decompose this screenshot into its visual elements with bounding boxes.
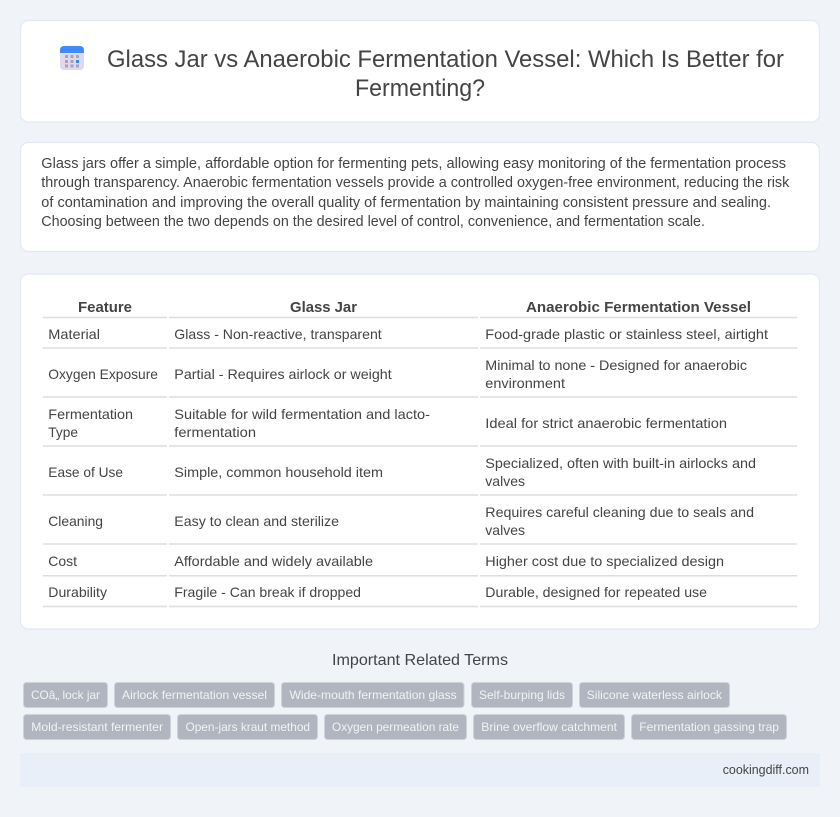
intro text: Choosing between the two depends on the desired level of control, convenience, and fermentation scale. [41,214,705,230]
row: oxygen exposure: Minimal to none - Designed for anaerobic [485,357,747,373]
tag: Airlock fermentation vessel [122,688,267,702]
row: durability: Durable, designed for repeated use [485,584,707,600]
table header row: Anaerobic Fermentation Vessel [526,299,751,316]
intro text: through transparency. Anaerobic fermentation vessels provide a controlled oxygen-free environment, reducing the risk [41,175,790,191]
table header row: Glass Jar [290,299,357,316]
intro text: of contamination and improving the overall quality of fermentation by maintaining consistent pressure and sealing. [41,195,771,211]
row: ease of use: Specialized, often with built-in airlocks and [485,455,756,471]
tag: Fermentation gassing trap [639,720,779,734]
tag: COâ„ lock jar [31,688,100,702]
row: oxygen exposure [48,357,747,391]
comparison table panel [20,274,820,629]
row: cleaning: Cleaning [48,513,103,529]
row: oxygen exposure: environment [485,375,565,391]
row: ease of use: valves [485,473,525,489]
header panel [20,20,820,122]
tag: Mold-resistant fermenter [31,720,163,734]
row: fermentation type: Ideal for strict anaerobic fermentation [485,415,727,431]
row: fermentation type: Type [48,424,78,440]
tag [324,714,466,740]
row: material: Glass - Non-reactive, transparent [174,326,382,342]
row: durability: Fragile - Can break if dropped [174,584,361,600]
tag: Self-burping lids [479,688,565,702]
tag: Wide-mouth fermentation glass [290,688,457,702]
footer [20,753,820,787]
tag [24,682,108,708]
footer: cookingdiff.com [723,763,809,777]
row: cleaning [48,504,754,538]
row: fermentation type: Fermentation [48,406,133,422]
row: ease of use [48,455,756,489]
tag: Silicone waterless airlock [587,688,723,702]
row: oxygen exposure: Partial - Requires airlock or weight [174,366,392,382]
tag [472,682,572,708]
row: fermentation type: Suitable for wild fermentation and lacto- [174,406,430,422]
title: Fermenting? [355,75,485,102]
tag [580,682,730,708]
row: ease of use: Ease of Use [48,464,123,480]
tag [282,682,464,708]
row: oxygen exposure: Oxygen Exposure [48,366,158,382]
title: Glass Jar vs Anaerobic Fermentation Vessel: Which Is Better for [107,46,784,73]
row: material: Food-grade plastic or stainless steel, airtight [485,326,768,342]
row: fermentation type [48,406,727,440]
icon: calendar grid [60,46,84,70]
tag [474,714,624,740]
row: cleaning: Requires careful cleaning due to seals and [485,504,754,520]
row: cost: Cost [48,553,77,569]
intro panel [20,142,820,252]
tag: Brine overflow catchment [481,720,618,734]
row: durability [48,584,707,600]
related terms heading: Important Related Terms [332,652,508,669]
row: cost: Higher cost due to specialized design [485,553,724,569]
row: ease of use: Simple, common household item [174,464,383,480]
table header row: Feature [78,299,132,316]
tag [114,682,274,708]
tag: Open-jars kraut method [186,720,310,734]
title [107,46,784,102]
row: cost [48,553,724,569]
tag: Oxygen permeation rate [332,720,459,734]
intro text [41,156,790,230]
table header row [78,299,751,316]
tag [632,714,786,740]
tag [178,714,318,740]
row: cost: Affordable and widely available [174,553,373,569]
row: material [48,326,768,342]
row: durability: Durability [48,584,107,600]
row: cleaning: valves [485,522,525,538]
tag [24,714,170,740]
related terms tags [24,682,786,740]
intro text: Glass jars offer a simple, affordable option for fermenting pets, allowing easy monitoring of the fermentation process [41,156,786,172]
row: material: Material [48,326,100,342]
row: fermentation type: fermentation [174,424,256,440]
row: cleaning: Easy to clean and sterilize [174,513,339,529]
